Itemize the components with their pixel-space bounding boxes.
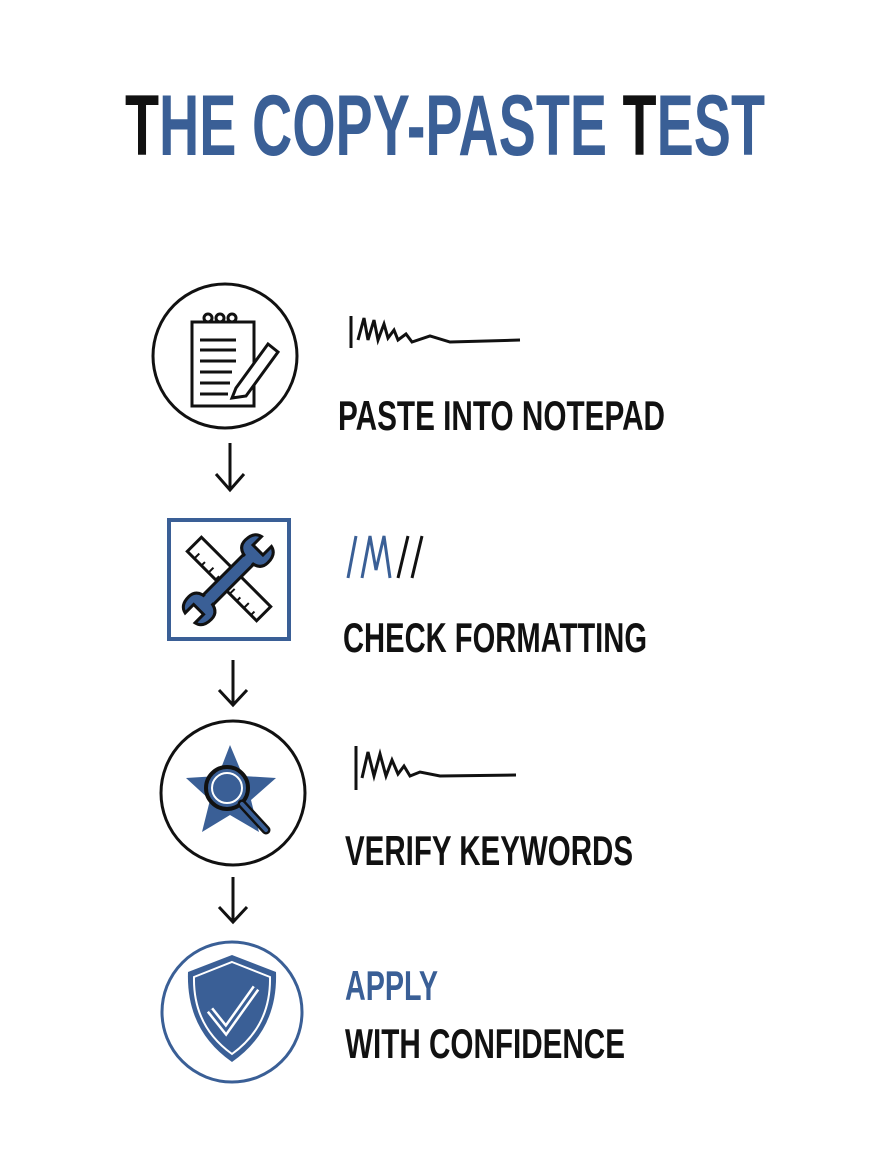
- step 1: paste into notepad: [153, 284, 665, 439]
- step 4: apply with confidence: [162, 942, 625, 1082]
- label: PASTE INTO NOTEPAD: [338, 392, 665, 439]
- icon: notepad: [153, 284, 297, 428]
- label: VERIFY KEYWORDS: [345, 827, 633, 874]
- icon: star with magnifier: [161, 721, 305, 865]
- squiggle: [356, 746, 516, 790]
- squiggle: [348, 536, 390, 578]
- arrow 1: [216, 443, 244, 490]
- step 3: verify keywords: [161, 721, 633, 874]
- arrow 3: [219, 877, 247, 922]
- icon: ruler and wrench: [169, 520, 289, 639]
- step 2: check formatting: [169, 520, 647, 661]
- squiggle: [351, 316, 520, 348]
- label: CHECK FORMATTING: [343, 614, 647, 661]
- icon: shield check: [162, 942, 302, 1082]
- step 4: apply with confidence: WITH CONFIDENCE: [345, 1020, 625, 1067]
- arrow 2: [219, 660, 247, 705]
- label: APPLY: [345, 962, 438, 1009]
- title: THE COPY-PASTE TEST: [125, 78, 765, 174]
